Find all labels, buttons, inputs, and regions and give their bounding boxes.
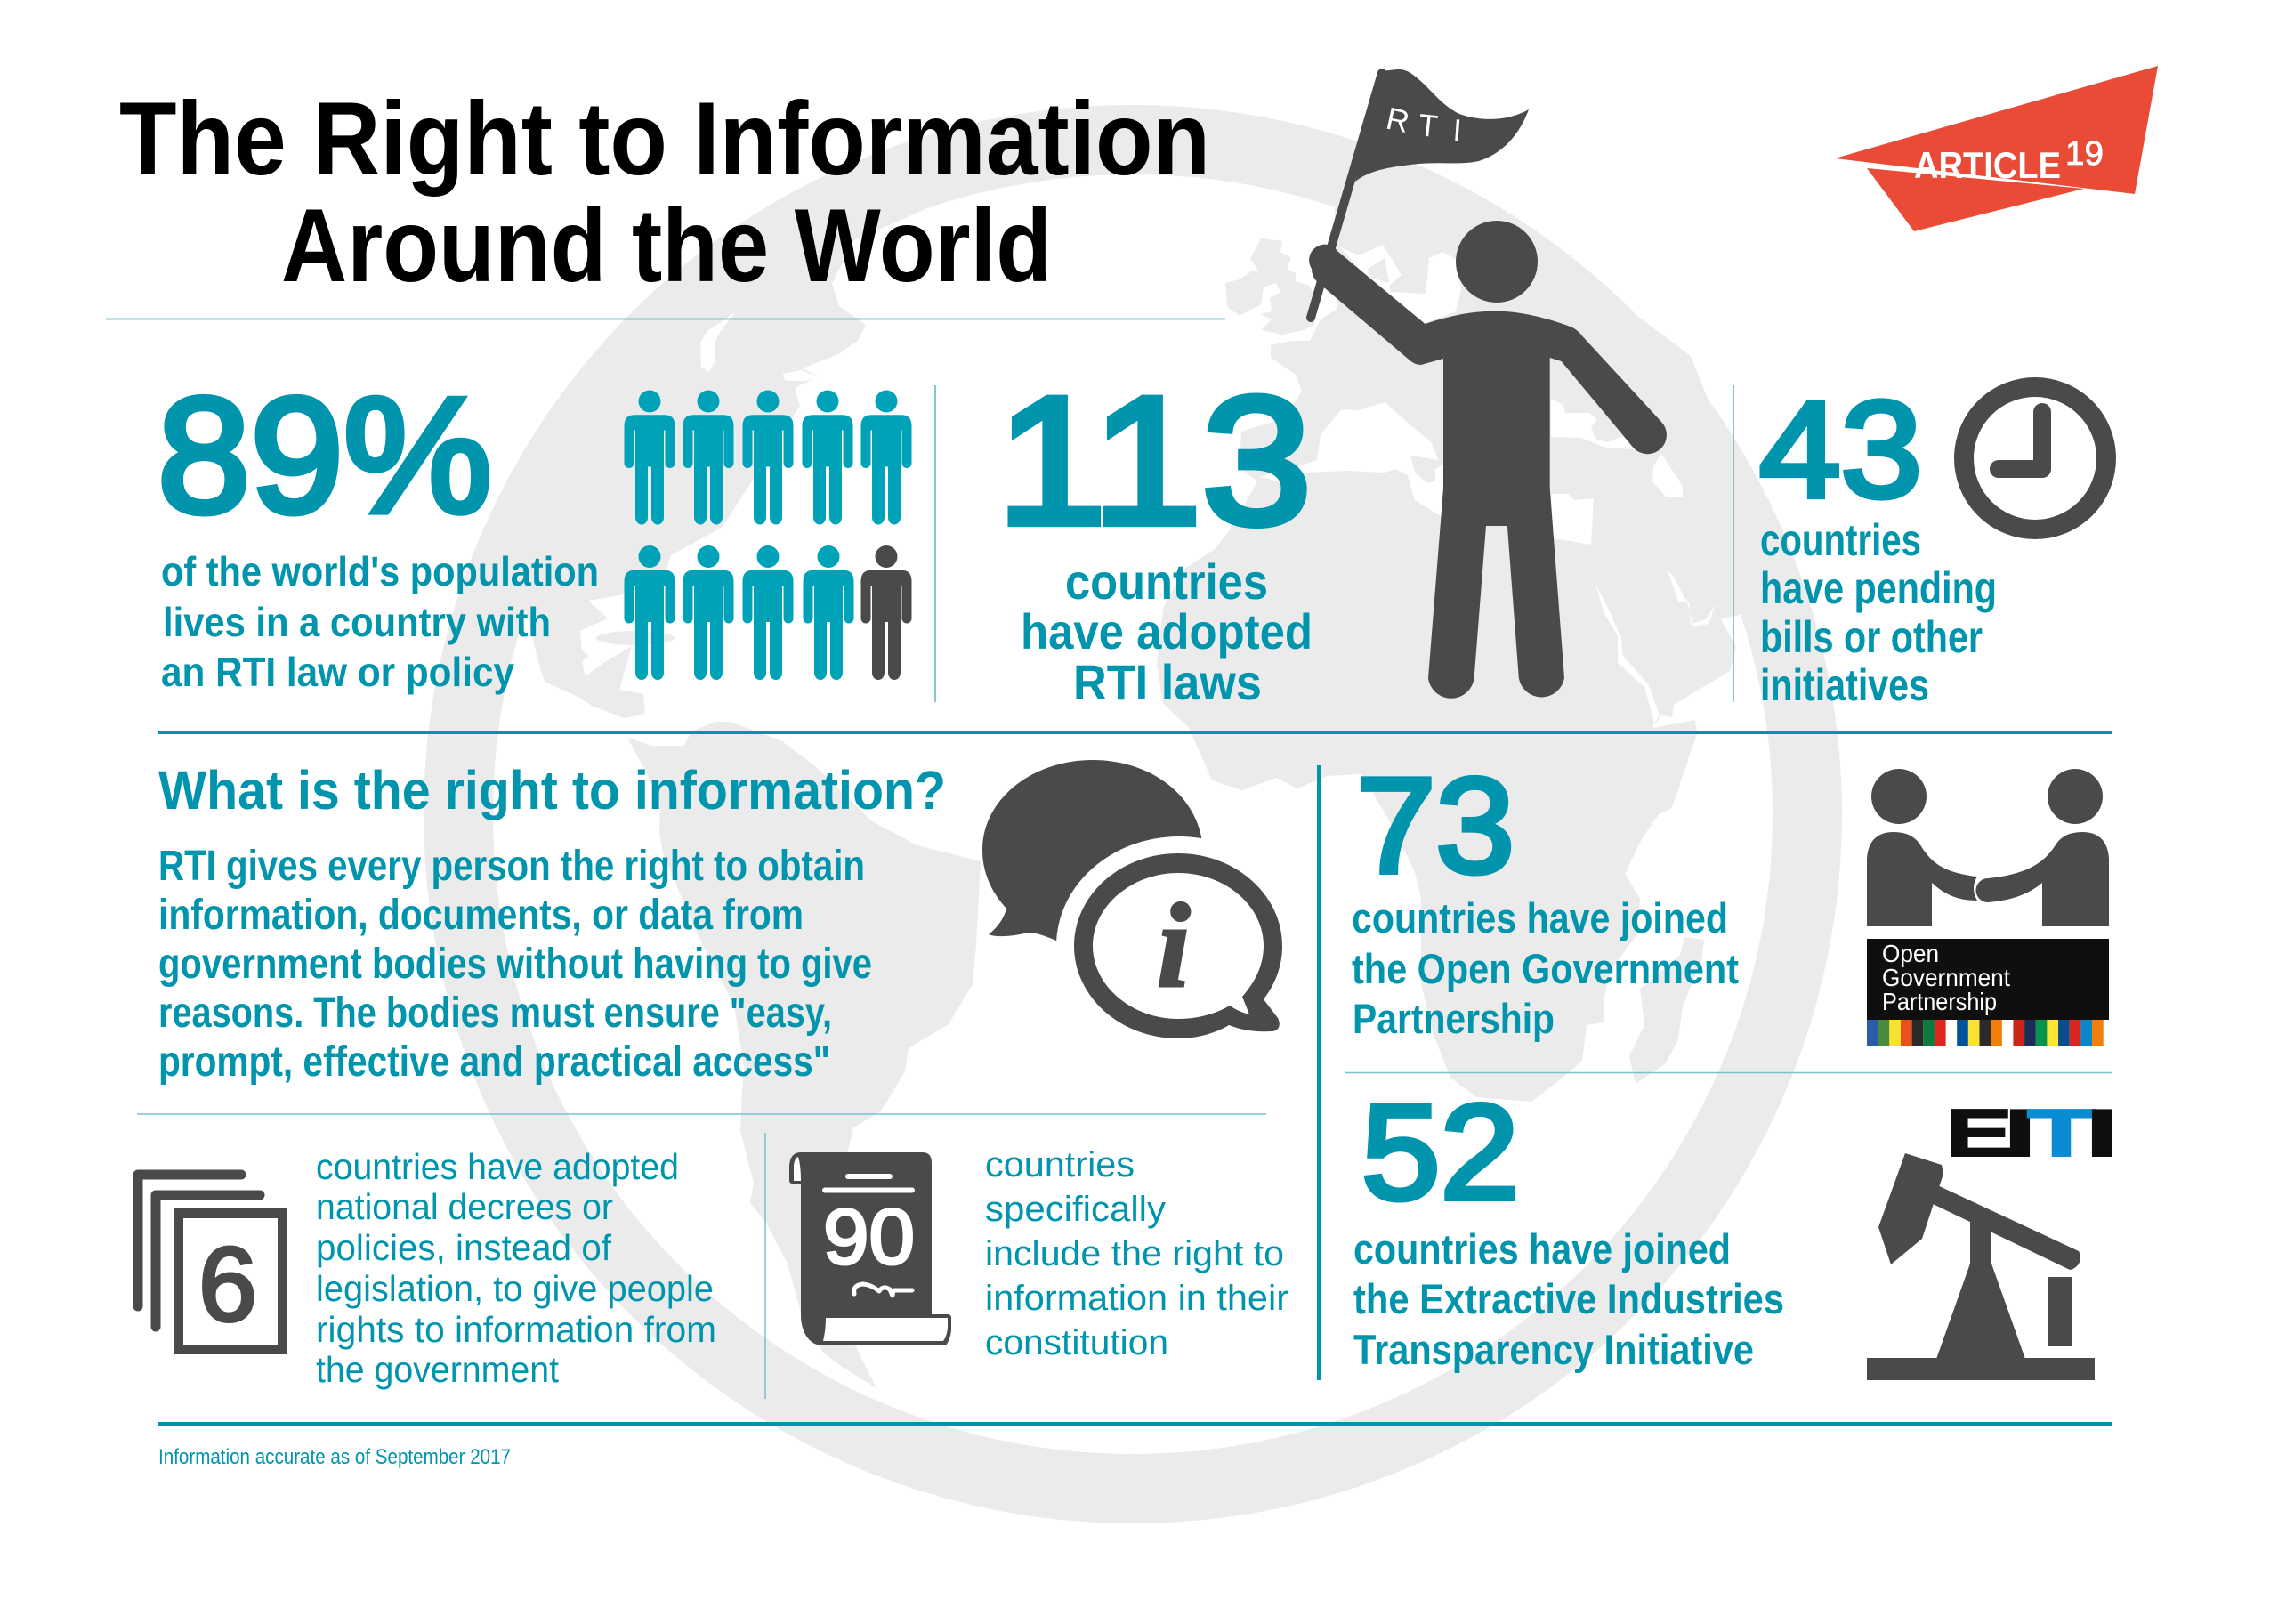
right figure	[1975, 832, 2109, 926]
Caspian Sea	[1652, 454, 1683, 497]
113 caption: RTI laws	[1073, 654, 1262, 710]
scroll line	[825, 1187, 912, 1192]
info i: i	[1157, 880, 1191, 1013]
flag text: I	[1451, 113, 1463, 149]
pump head	[1878, 1153, 1943, 1264]
52 number: 52	[1361, 1077, 1519, 1228]
RTI definition text: prompt, effective and practical access"	[158, 1038, 830, 1086]
scroll curl	[794, 1157, 801, 1181]
icon: handshake	[1867, 769, 2109, 926]
footnote: Information accurate as of September 2017	[158, 1445, 511, 1469]
flag pole	[1311, 73, 1382, 318]
divider	[934, 385, 936, 702]
43 caption	[1760, 515, 1997, 710]
info bubble inner	[1093, 873, 1264, 1019]
dark bubble	[982, 760, 1203, 949]
Mediterranean sea	[1259, 402, 1443, 518]
vertical divider	[1317, 765, 1321, 1380]
body	[1309, 245, 1667, 699]
scroll foot	[823, 1318, 948, 1341]
bubble gap	[1056, 836, 1302, 1055]
South America	[627, 722, 981, 1388]
OGP black box	[1867, 939, 2109, 1020]
ARTICLE 19 logo	[1835, 66, 2158, 231]
constitution text: countries	[985, 1145, 1135, 1184]
Baltic sea	[1340, 245, 1461, 324]
43 caption: countries	[1760, 515, 1921, 565]
icon: clock	[1964, 387, 2106, 529]
pump rod	[2048, 1277, 2072, 1346]
OGP text: Partnership	[1882, 988, 1997, 1015]
icon: people 9 of 10	[625, 390, 911, 680]
43 caption: initiatives	[1760, 660, 1929, 710]
signature	[854, 1284, 912, 1296]
clock face	[1964, 387, 2106, 529]
89% caption	[161, 548, 599, 695]
decrees text	[316, 1146, 716, 1390]
decrees text: the government	[316, 1349, 560, 1390]
OGP text: Government	[1882, 964, 2010, 991]
73 number: 73	[1357, 750, 1515, 901]
52 caption: Transparency Initiative	[1353, 1326, 1754, 1373]
flag text: T	[1417, 108, 1440, 144]
Black Sea	[1551, 399, 1634, 449]
stat: 89 percent	[158, 363, 599, 695]
middle rule	[137, 1113, 1266, 1115]
middle sheet	[156, 1195, 260, 1327]
divider	[1733, 385, 1734, 702]
113 caption	[1021, 553, 1313, 710]
EITI logo: I	[2086, 1095, 2118, 1170]
stat: 52	[1353, 1077, 1784, 1373]
pump tower	[1935, 1219, 2026, 1361]
right rule	[1345, 1071, 2112, 1073]
constitution text: constitution	[985, 1323, 1168, 1362]
constitution text	[985, 1145, 1288, 1362]
logo number: 19	[2065, 135, 2104, 173]
RTI definition text: government bodies without having to give	[158, 941, 872, 988]
left figure	[1867, 832, 1977, 926]
right head	[2048, 769, 2103, 824]
icon: constitution scroll 90	[789, 1152, 951, 1345]
73 caption	[1352, 894, 1739, 1042]
North America	[525, 209, 925, 718]
Scandinavia sliver	[1368, 258, 1389, 283]
title	[119, 80, 1210, 303]
Persian Gulf	[1668, 570, 1716, 626]
title: The Right to Information	[119, 80, 1210, 197]
Cuba	[596, 631, 675, 645]
logo text: ARTICLE	[1914, 144, 2061, 186]
Madagascar	[1629, 937, 1704, 1084]
flag text	[1383, 101, 1463, 149]
Great Lakes	[783, 370, 820, 381]
43 caption: have pending	[1760, 563, 1997, 613]
113 caption: have adopted	[1021, 603, 1313, 659]
British Isles	[1225, 238, 1317, 335]
pump beam	[1931, 1184, 2080, 1270]
title: Around the World	[281, 187, 1052, 303]
flag	[1355, 69, 1529, 182]
RTI definition text	[158, 843, 872, 1086]
decrees text: rights to information from	[316, 1309, 716, 1350]
person holding RTI flag	[1309, 69, 1667, 699]
52 caption	[1353, 1225, 1784, 1373]
89% number: 89%	[158, 363, 492, 546]
113 number: 113	[997, 360, 1312, 562]
stat: 113	[997, 360, 1313, 710]
scroll body	[789, 1152, 951, 1345]
icon: speech bubbles with i	[982, 760, 1302, 1055]
EITI logo	[1945, 1095, 2118, 1170]
clock hands	[1999, 412, 2042, 469]
decrees text: national decrees or	[316, 1186, 613, 1227]
constitution text: information in their	[985, 1279, 1288, 1318]
decrees text: legislation, to give people	[316, 1268, 714, 1309]
Eastern Mediterranean	[1551, 494, 1594, 545]
title rule	[106, 319, 1225, 320]
background globe	[458, 140, 1807, 1489]
EITI logo: E	[1945, 1095, 2013, 1170]
OGP text	[1882, 940, 2010, 1015]
logo lower shape	[1867, 168, 2084, 231]
constitution text: specifically	[985, 1190, 1166, 1229]
bottom rule	[158, 1422, 2112, 1426]
top row rule	[158, 731, 2112, 734]
flag text: R	[1383, 101, 1412, 140]
logo upper shape	[1835, 66, 2158, 194]
73 caption: countries have joined	[1352, 894, 1728, 941]
decrees text: policies, instead of	[316, 1227, 612, 1268]
43 number: 43	[1759, 373, 1922, 526]
EITI logo: I	[2004, 1095, 2036, 1170]
globe ring	[458, 140, 1807, 1489]
icon: stacked documents 6	[138, 1175, 283, 1349]
stat: 43	[1759, 373, 1997, 710]
Hudson Bay	[700, 312, 735, 372]
head	[1456, 221, 1538, 303]
number 6: 6	[198, 1226, 257, 1344]
52 caption: the Extractive Industries	[1353, 1275, 1784, 1322]
OGP stripes	[1867, 1020, 2104, 1046]
icon: oil pump	[1867, 1153, 2095, 1380]
73 caption: the Open Government	[1352, 945, 1739, 992]
RTI definition text: reasons. The bodies must ensure "easy,	[158, 990, 832, 1037]
RTI definition text: information, documents, or data from	[158, 892, 804, 939]
OGP text: Open	[1882, 940, 1939, 967]
Africa and Eurasia	[1157, 205, 1762, 1102]
73 caption: Partnership	[1353, 995, 1555, 1042]
113 caption: countries	[1065, 553, 1268, 610]
decrees text: countries have adopted	[316, 1146, 679, 1187]
constitution text: include the right to	[985, 1234, 1284, 1273]
heading: what is RTI: What is the right to information?	[158, 760, 946, 820]
89% caption: lives in a country with	[163, 599, 551, 645]
Red Sea	[1595, 584, 1660, 726]
52 caption: countries have joined	[1353, 1225, 1731, 1273]
back sheet	[138, 1175, 241, 1306]
pump base	[1867, 1358, 2095, 1380]
89% caption: of the world's population	[161, 548, 599, 594]
RTI definition text: RTI gives every person the right to obtain	[158, 843, 865, 890]
89% caption: an RTI law or policy	[161, 649, 514, 695]
stat: 73	[1352, 750, 1739, 1042]
scroll line	[848, 1174, 890, 1179]
front sheet	[178, 1214, 283, 1349]
info bubble outer	[1074, 853, 1282, 1038]
43 caption: bills or other	[1760, 612, 1983, 662]
divider	[764, 1133, 766, 1399]
EITI logo: T	[2027, 1095, 2096, 1170]
left head	[1871, 769, 1927, 824]
Open Government Partnership logo	[1867, 939, 2109, 1046]
number 90: 90	[823, 1192, 915, 1281]
